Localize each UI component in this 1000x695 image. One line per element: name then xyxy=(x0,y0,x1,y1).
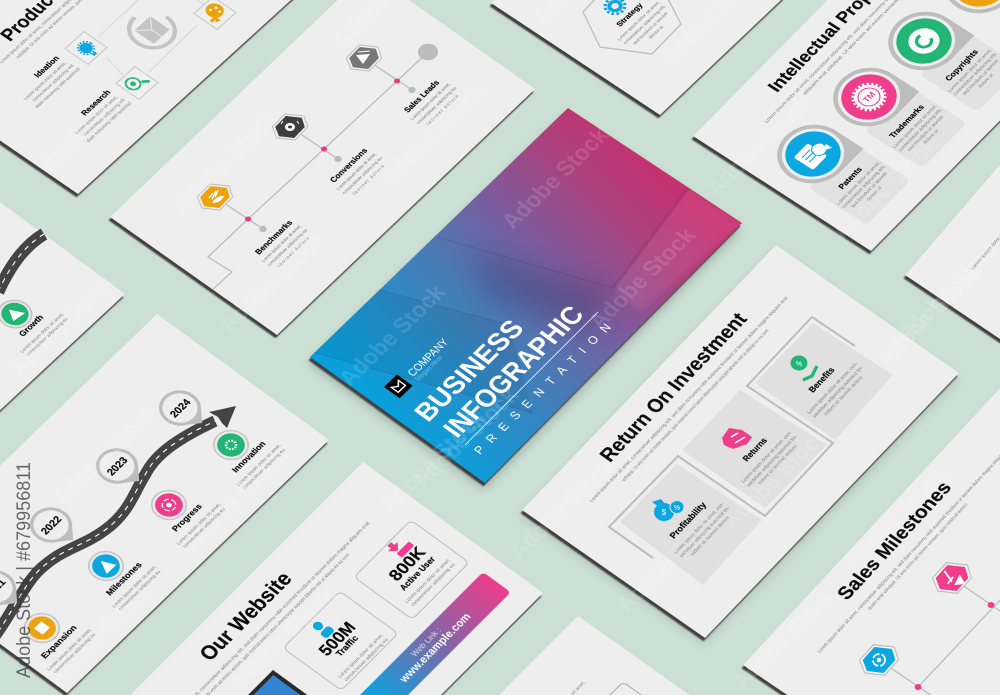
label: active user: Active User xyxy=(397,554,438,592)
icon: growth xyxy=(0,295,38,333)
item: trademarks: Lorem ipsum dolor sit amet, xyxy=(892,104,939,150)
heading: sales milestones: Sales Milestones xyxy=(834,478,956,604)
label: milestones xyxy=(98,555,164,613)
panel: cover slide xyxy=(308,108,742,490)
label: ideation: consectetuer adipiscing elit xyxy=(31,63,75,103)
card: traffic xyxy=(283,591,398,690)
timeline line xyxy=(208,52,428,289)
label: conversions: Lorem ipsum dolor sit amet, xyxy=(335,152,378,191)
watermarks: Adobe Stock xyxy=(582,223,701,333)
label: sales leads xyxy=(400,75,464,129)
label: innovation: Innovation xyxy=(229,439,268,474)
watermarks: Adobe Stock xyxy=(715,423,834,533)
item: orange badge xyxy=(930,0,1000,25)
icon: returns xyxy=(722,428,752,449)
label: conversions: consectetuer adipiscing eu xyxy=(341,156,384,195)
watermarks: Adobe Stock xyxy=(39,580,158,690)
label: innovation: Lorem ipsum dolor sit amet, xyxy=(236,443,283,487)
label: progress: Lorem ipsum dolor sit amet, xyxy=(176,502,223,546)
icon: gray hexagon xyxy=(346,45,382,71)
icon: benefits: % xyxy=(796,361,802,368)
icon: blue hexagon xyxy=(860,645,898,675)
label: active user: consectetuer adipiscing eu xyxy=(410,562,457,608)
watermarks: Adobe Stock xyxy=(699,90,818,200)
heading: return on investment: Return On Investment xyxy=(596,309,752,466)
watermarks: Adobe Stock xyxy=(609,506,728,616)
connector lines xyxy=(98,0,205,75)
road segment xyxy=(0,234,44,292)
item: trademarks xyxy=(819,56,967,169)
label: growth xyxy=(7,303,70,358)
item: trademarks: dolore ut xyxy=(922,128,941,145)
label: innovation: consectetuer adipiscing eu xyxy=(242,447,287,490)
label: profitability xyxy=(659,492,737,563)
watermarks: Adobe Stock xyxy=(372,80,491,190)
label: research: diam nonummy nibh euismod xyxy=(85,101,133,143)
icon: download user xyxy=(385,534,414,560)
cover facets xyxy=(313,188,742,413)
icon: money bag: % xyxy=(674,505,680,512)
label: benchmarks xyxy=(251,217,315,271)
icon: milestones xyxy=(82,546,130,586)
text: slogan: Slogan Here xyxy=(412,353,445,383)
item: patents: Lorem ipsum dolor sit amet, xyxy=(835,161,882,206)
label: profitability: Profitability xyxy=(667,500,709,540)
label: research: consectetuer adipiscing elit xyxy=(82,97,127,137)
label: milestones: consectetuer adipiscing eu xyxy=(117,569,163,612)
label: benchmarks: Lorem ipsum dolor sit amet, xyxy=(260,224,303,263)
label: research: Research xyxy=(79,88,113,117)
label: active user: Lorem ipsum dolor sit amet, xyxy=(404,558,452,605)
text: company: COMPANY xyxy=(405,336,452,379)
watermarks: Adobe Stock xyxy=(835,463,954,573)
stock id text: Adobe Stock | #679956811 xyxy=(14,462,35,678)
icon: money bag xyxy=(652,499,684,521)
node: research xyxy=(116,67,158,99)
label: growth: consectetuer adipiscing eu xyxy=(25,316,69,357)
icon: orange hexagon xyxy=(197,184,233,210)
title: infographic: INFOGRAPHIC xyxy=(437,301,590,443)
small gray dots xyxy=(258,86,417,233)
watermarks: Adobe Stock xyxy=(212,226,331,336)
watermarks: Adobe Stock xyxy=(332,280,451,390)
label: returns: Lorem ipsum dolor sit amet, con- xyxy=(740,430,794,484)
item: patents: consectetuer adipiscing elit, xyxy=(841,164,887,210)
box: profitability xyxy=(620,464,762,585)
box: returns xyxy=(682,390,827,508)
item: copyrights: dolore ut xyxy=(977,72,996,89)
node: ideation xyxy=(65,32,107,64)
road arrow xyxy=(0,406,236,640)
item: patents: dolore ut xyxy=(865,185,884,202)
label: milestones: Lorem ipsum dolor sit amet, xyxy=(111,564,158,609)
watermarks: Adobe Stock xyxy=(372,406,491,516)
label: benefits: sectetuer adipiscing euismod tin- xyxy=(812,365,865,419)
label: benefits xyxy=(793,352,871,423)
subtitle: presentation: PRESENTATION xyxy=(471,321,614,457)
item: trademarks: Trademarks xyxy=(887,103,927,140)
watermarks: Adobe Stock xyxy=(495,123,614,233)
zigzag frame xyxy=(609,317,855,558)
stat: 500M: 500M xyxy=(315,619,360,659)
watermarks: Adobe Stock xyxy=(175,443,294,553)
box: benefits xyxy=(755,323,893,440)
item: patents: sed tincidunt ut laoreet xyxy=(850,171,889,209)
pin: 2021 xyxy=(0,563,30,617)
label: growth: Growth xyxy=(17,313,46,338)
label: profitability: cidunt ut laoreet dolore xyxy=(689,515,732,557)
label: sales leads: consectetuer adipiscing eu xyxy=(415,86,458,125)
label: expansion: consectetuer adipiscing eu xyxy=(52,632,98,675)
pink dots xyxy=(913,601,996,691)
label: profitability: sectetuer adipiscing euismod tin- xyxy=(678,505,732,559)
label: growth: Lorem ipsum dolor sit amet, xyxy=(19,312,65,354)
label: progress xyxy=(163,493,228,550)
label: innovation xyxy=(223,434,288,491)
pin: 2023: 2023 xyxy=(105,455,131,478)
label: progress: consectetuer adipiscing eu xyxy=(182,506,227,549)
item: trademarks: consectetuer adipiscing elit, xyxy=(897,107,944,153)
text: url: www.example.com xyxy=(397,611,474,686)
label: returns: cidunt ut laoreet dolore xyxy=(757,444,799,486)
card: active user xyxy=(354,520,469,619)
banner: web link xyxy=(310,572,511,695)
label: traffic: Traffic xyxy=(333,633,361,658)
label: conversions: laoreet dolore xyxy=(351,164,386,196)
label: strategy xyxy=(605,0,678,53)
panel: right edge slide xyxy=(904,0,1000,396)
label: benchmarks: laoreet dolore xyxy=(276,236,311,268)
label: expansion: Expansion xyxy=(38,623,79,660)
watermarks: Adobe Stock xyxy=(825,133,944,243)
label: active user xyxy=(392,549,457,608)
label: ideation xyxy=(13,52,81,109)
label: conversions: Conversions xyxy=(328,146,370,184)
watermarks: Adobe Stock xyxy=(725,583,844,693)
panel: product development slide xyxy=(0,0,336,197)
label: benefits: Benefits xyxy=(806,365,837,394)
label: strategy: dolore ut xyxy=(647,24,665,40)
watermarks: Adobe Stock xyxy=(165,106,284,216)
pin: 2024 xyxy=(150,383,215,437)
label: sales leads: Sales Leads xyxy=(402,78,442,114)
end dot xyxy=(414,40,442,64)
pink dots xyxy=(244,77,401,223)
item: copyrights: sed tincidunt ut laoreet xyxy=(961,58,1000,97)
panel: our website slide xyxy=(104,462,543,695)
label: conversions xyxy=(326,145,390,199)
laptop image xyxy=(223,670,327,695)
panel: strategy slide xyxy=(490,0,918,118)
label: strategy: Lorem ipsum dolor sit amet, xyxy=(616,0,661,41)
item: copyrights: Copyrights xyxy=(943,48,981,83)
watermarks: Adobe Stock xyxy=(405,383,524,493)
heading: our website: Our Website xyxy=(195,568,297,665)
item: copyrights: Lorem ipsum dolor sit amet, xyxy=(947,48,994,94)
label: benchmarks: Benchmarks xyxy=(253,218,295,256)
label: ideation: Lorem ipsum dolor sit amet, xyxy=(22,61,68,101)
pin: 2024: 2024 xyxy=(168,397,194,420)
label: returns xyxy=(727,421,805,492)
watermarks: Adobe Stock xyxy=(45,400,164,510)
item: trademarks: TM xyxy=(860,90,877,104)
label: expansion xyxy=(33,618,99,676)
label: ideation: diam nonummy nibh euismod xyxy=(34,66,81,109)
icon: benefits xyxy=(790,356,817,380)
pin: 2022: 2022 xyxy=(39,514,65,537)
label: benefits: cidunt ut laoreet dolore xyxy=(823,375,865,417)
watermarks: Adobe Stock xyxy=(869,260,988,370)
pin: 2023 xyxy=(87,441,152,495)
pin: 2022 xyxy=(21,500,86,554)
icon: innovation xyxy=(207,425,255,465)
label: sales leads: laoreet dolore xyxy=(425,94,460,126)
label: benchmarks: consectetuer adipiscing eu xyxy=(266,228,309,267)
label: sales leads: Lorem ipsum dolor sit amet, xyxy=(409,82,452,121)
watermarks: Adobe Stock xyxy=(32,66,151,176)
timeline line xyxy=(879,578,1000,695)
label: traffic xyxy=(321,621,391,684)
logo xyxy=(384,374,413,398)
panel: roadmap slide xyxy=(0,314,329,695)
item: patents xyxy=(763,113,911,226)
item: patents: Patents xyxy=(837,165,865,191)
panel: return on investment slide xyxy=(520,245,959,644)
heading: return on investment: Lorem ipsum dolor sit amet, consectetuer adipiscing elit, sed diam nonummy nibh euismod tincidunt ut laoreet dolore magna aliquam erat xyxy=(589,295,790,504)
item: copyrights: consectetuer adipiscing elit, xyxy=(952,51,999,97)
icon: dark hexagon xyxy=(272,114,308,140)
icon: cube cycle xyxy=(120,5,184,55)
title: business: BUSINESS xyxy=(408,315,530,427)
text: web link: Web Link : xyxy=(409,626,443,658)
label: research: Lorem ipsum dolor sit amet, xyxy=(74,95,119,135)
item: copyrights xyxy=(874,0,1000,113)
panel: growth slide xyxy=(0,169,125,537)
icon: person xyxy=(310,618,335,639)
heading: return on investment: volutpat. Ut wisi enim ad minim veniam, quis nostrud exerci tation ullamcorper suscipit lobortis nisl ut aliquip ex ea com xyxy=(621,328,771,483)
icon: progress xyxy=(145,485,193,525)
item: trademarks: sed tincidunt ut laoreet xyxy=(906,114,946,153)
watermarks: Adobe Stock xyxy=(2,270,121,380)
watermarks: Adobe Stock xyxy=(222,583,341,693)
label: returns: sectetuer adipiscing euismod tin- xyxy=(746,434,799,488)
icon: pink hexagon xyxy=(933,563,971,593)
label: returns: Returns xyxy=(740,436,769,463)
stat: 800K: 800K xyxy=(385,544,430,584)
outlined card xyxy=(580,682,675,695)
label: profitability: Lorem ipsum dolor sit amet, con- xyxy=(673,501,726,555)
label: benefits: Lorem ipsum dolor sit amet, con- xyxy=(806,361,860,415)
label: progress: Progress xyxy=(169,501,204,533)
label: strategy: Strategy xyxy=(614,1,645,28)
label: milestones: Milestones xyxy=(103,560,144,597)
icon: money bag: $ xyxy=(662,508,667,517)
panel: bottom slide xyxy=(320,616,753,695)
panel: intellectual property slide xyxy=(692,0,1000,254)
label: ideation: Ideation xyxy=(32,54,62,79)
panel: sales milestones slide xyxy=(742,387,1000,695)
icon: blue gear xyxy=(601,0,629,17)
label: traffic: Lorem ipsum dolor sit amet, xyxy=(337,633,385,680)
label: research xyxy=(64,86,133,143)
panel: sales funnel timeline slide xyxy=(108,0,535,338)
heading: sales milestones: quam erat volutpat. Ut wisi enim ad minim veniam, quis nostrud exerci xyxy=(867,502,969,611)
heading: our website xyxy=(130,503,379,695)
node: orange palette xyxy=(194,0,236,29)
watermarks: Adobe Stock xyxy=(502,453,621,563)
label: traffic: consectetuer adipiscing eu xyxy=(343,637,390,683)
label: expansion: Lorem ipsum dolor sit amet, xyxy=(46,627,93,672)
icon: expansion xyxy=(18,608,66,648)
hexagon outline xyxy=(583,0,681,54)
label: strategy: consectetuer adipiscing elit, xyxy=(622,4,667,45)
label: strategy: sed tincidunt ut laoreet xyxy=(631,11,669,46)
